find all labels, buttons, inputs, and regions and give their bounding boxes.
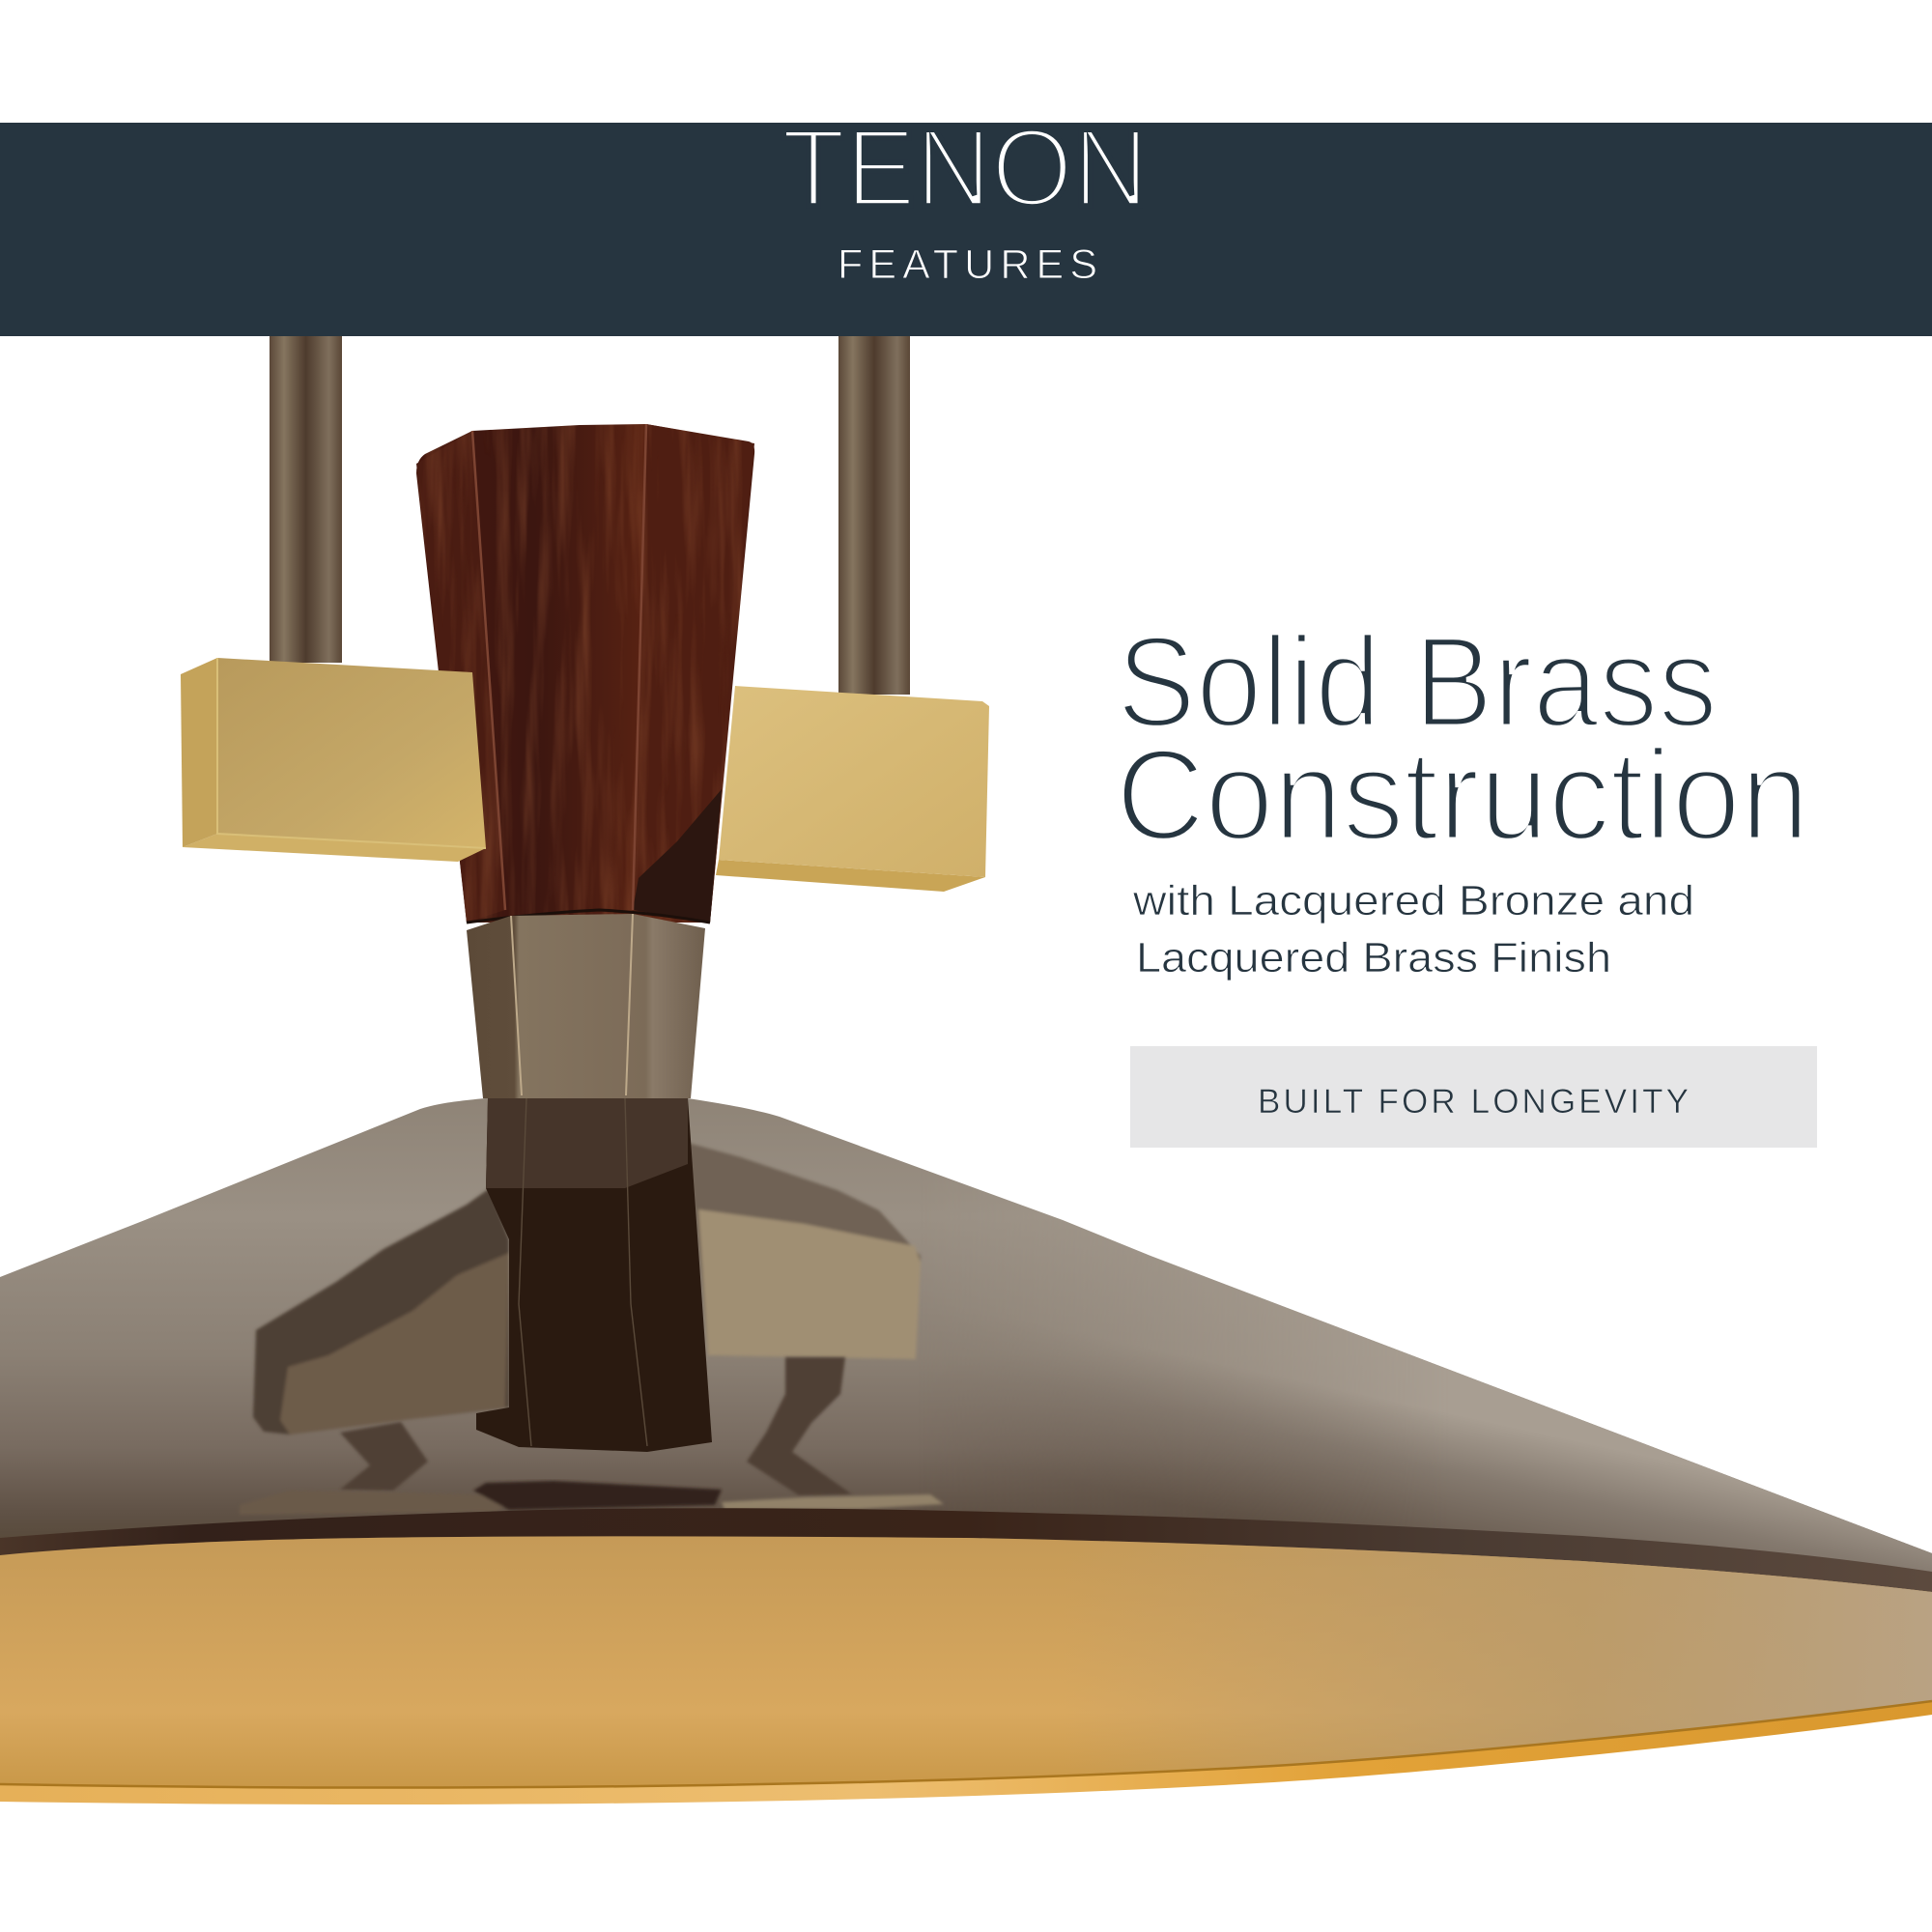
right brass block [716, 686, 989, 892]
subheading [1132, 877, 1694, 981]
reflection: stem column [476, 1098, 712, 1452]
subheading: Lacquered Brass Finish [1136, 934, 1611, 981]
left brass block [181, 658, 486, 862]
right rod [838, 336, 910, 695]
heading [1116, 611, 1809, 867]
wood stem [411, 420, 763, 927]
left rod [270, 336, 342, 663]
header band [0, 107, 1932, 336]
gold interior [0, 1536, 1932, 1788]
reflection: lower bars [240, 1481, 944, 1515]
callout button: BUILT FOR LONGEVITY [1258, 1083, 1689, 1121]
callout button [1130, 1046, 1817, 1148]
title: TENON [781, 107, 1149, 230]
heading: Construction [1116, 724, 1809, 867]
subheading: with Lacquered Bronze and [1132, 877, 1694, 924]
reflection: left block [253, 1188, 509, 1435]
lamp illustration [0, 336, 1932, 1804]
reflection: legs [340, 1357, 852, 1495]
rim band [0, 1508, 1932, 1592]
gold rim edge [0, 1699, 1932, 1804]
shade body [0, 1098, 1932, 1594]
subtitle: FEATURES [838, 242, 1097, 288]
bronze collar [467, 914, 705, 1098]
reflection: right block [688, 1143, 921, 1359]
heading: Solid Brass [1117, 611, 1718, 754]
